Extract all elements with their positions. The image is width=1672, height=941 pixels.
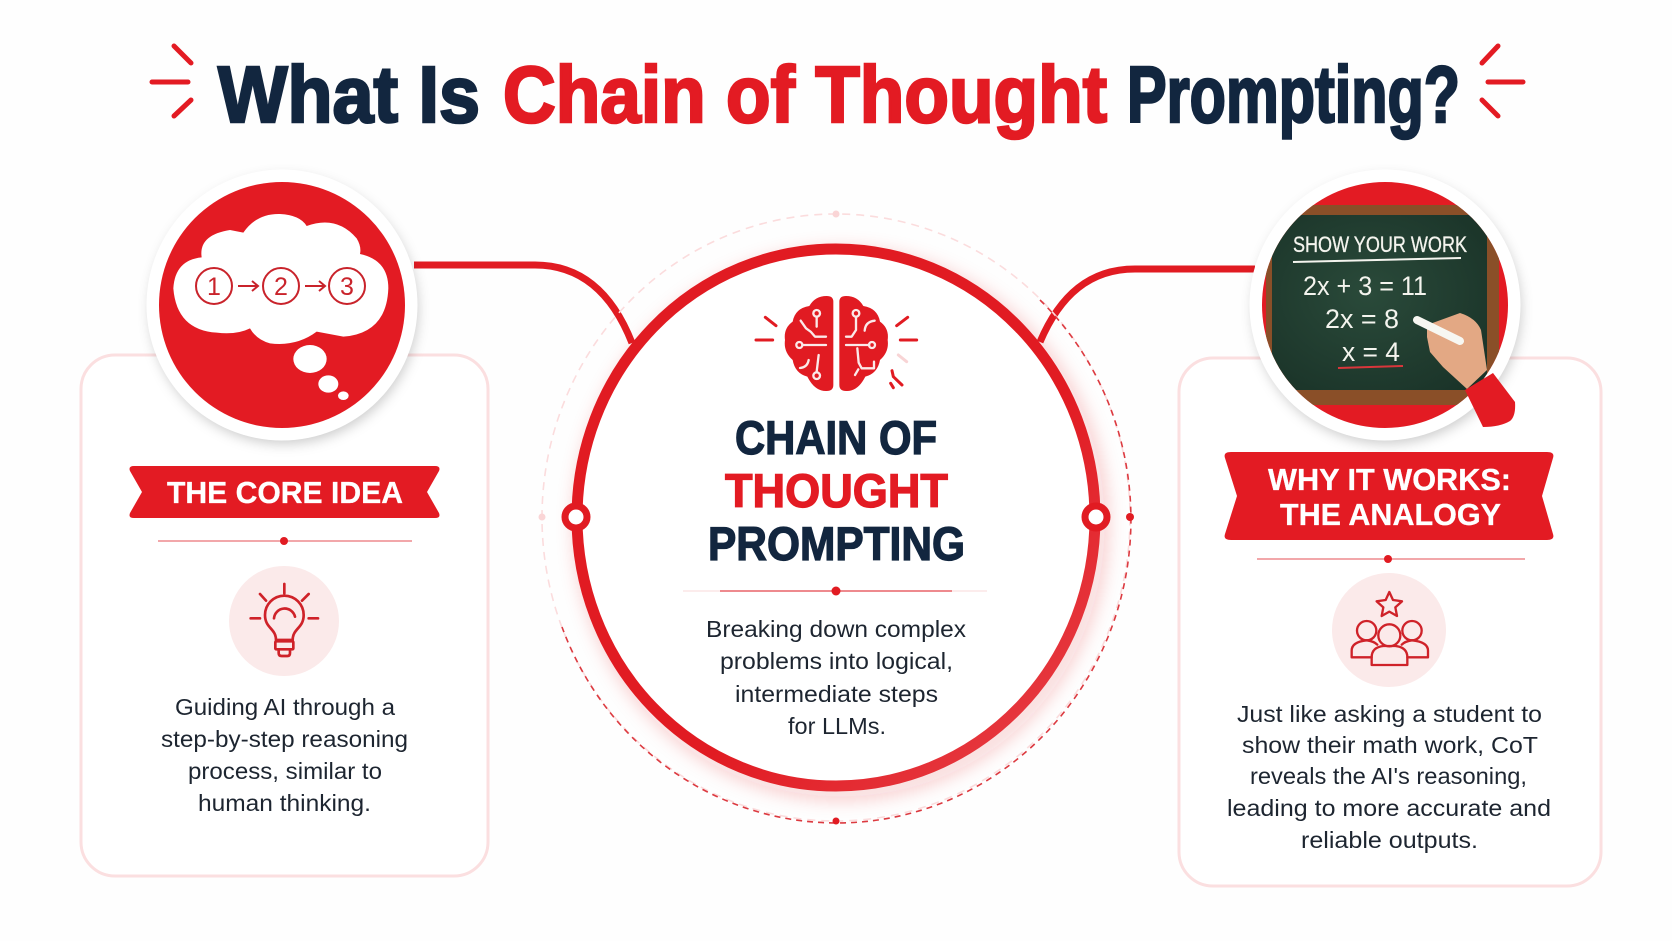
circle shadow: [1253, 176, 1521, 444]
ribbon: the core idea: THE CORE IDEA: [167, 475, 403, 510]
divider: left: [158, 537, 412, 545]
heading: chain of thought prompting: PROMPTING: [708, 517, 965, 570]
circle shadow: [150, 176, 418, 444]
text: centre description: Breaking down complex: [706, 616, 967, 642]
title: Prompting?: [1127, 50, 1460, 139]
text: core idea description: Guiding AI through a: [175, 694, 395, 720]
chalkboard: [1266, 205, 1499, 405]
board text: x = 4: [1342, 337, 1400, 367]
red disc: [159, 182, 405, 428]
circle: chalkboard analogy: [1250, 170, 1521, 444]
text: analogy description: reveals the AI's reasoning,: [1250, 763, 1527, 789]
board text: SHOW YOUR WORK: [1293, 232, 1467, 257]
board text: 2x + 3 = 11: [1303, 271, 1427, 301]
main ring: [577, 249, 1095, 786]
icon: cloud: [173, 214, 388, 400]
divider: right: [1257, 555, 1525, 563]
panel: why it works card: [1179, 358, 1601, 886]
steps 1 to 3: 3: [340, 273, 354, 301]
text: centre description: intermediate steps: [735, 681, 938, 707]
board text: 2x = 8: [1325, 304, 1399, 334]
board text: [1293, 232, 1467, 368]
orbit markers: [832, 513, 1134, 824]
text: core idea description: process, similar to: [188, 758, 382, 784]
red dashed outer orbit: [562, 300, 1131, 823]
text: core idea description: step-by-step reasoning: [161, 726, 408, 752]
steps 1 to 3: [196, 268, 365, 304]
circle: thought cloud: [146, 170, 418, 444]
title: Chain of Thought: [503, 50, 1107, 139]
icon: brain with circuits: [756, 296, 917, 391]
title: What Is: [218, 50, 480, 139]
icon: right title sparks: [1482, 46, 1523, 116]
icon: hand with chalk: [1417, 313, 1515, 427]
text: analogy description: reliable outputs.: [1301, 827, 1478, 853]
text: analogy description: Just like asking a student to: [1237, 701, 1542, 727]
panel: the core idea card: [81, 355, 488, 876]
ring shadow: [582, 256, 1100, 792]
white ring: [1250, 170, 1520, 440]
heading: chain of thought prompting: THOUGHT: [725, 464, 948, 517]
text: analogy description: leading to more accurate and: [1227, 795, 1551, 821]
text: core idea description: [161, 694, 408, 816]
red disc: [1262, 182, 1508, 428]
text: centre description: problems into logical,: [720, 648, 953, 674]
text: analogy description: show their math work, CoT: [1242, 732, 1538, 758]
ribbon: why it works: THE ANALOGY: [1280, 497, 1501, 532]
central hub circle: [538, 210, 1134, 824]
connector: left circle to centre: [414, 265, 632, 343]
title: [218, 50, 1460, 139]
icon: team with star: [1332, 573, 1446, 687]
white ring: [146, 170, 418, 440]
text: analogy description: [1227, 701, 1551, 853]
ribbon: why it works: WHY IT WORKS:: [1268, 462, 1511, 497]
text: core idea description: human thinking.: [198, 790, 371, 816]
orbit markers faint: [538, 210, 840, 520]
steps 1 to 3: 2: [274, 273, 288, 301]
text: centre description: [706, 616, 967, 739]
text: centre description: for LLMs.: [788, 713, 886, 739]
icon: lightbulb: [229, 566, 339, 676]
heading: chain of thought prompting: CHAIN OF: [735, 411, 937, 464]
steps 1 to 3: 1: [207, 273, 221, 301]
left ring node: [565, 506, 587, 528]
ribbon: why it works: [1225, 452, 1553, 540]
connector: right circle to centre: [1040, 269, 1255, 342]
right ring node: [1085, 506, 1107, 528]
ribbon: the core idea: [130, 466, 440, 518]
divider: centre: [683, 586, 987, 596]
faint dashed outer orbit: [542, 214, 1130, 821]
icon: left title sparks: [152, 46, 191, 116]
heading: chain of thought prompting: [708, 411, 965, 570]
